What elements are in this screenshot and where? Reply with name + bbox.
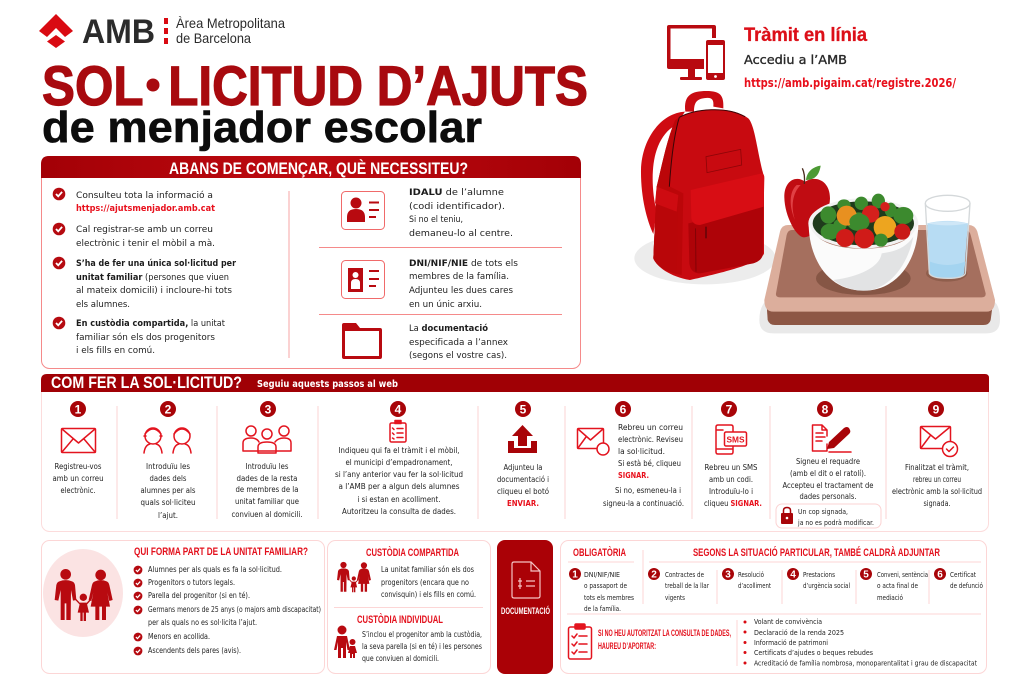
- mandatory heading: OBLIGATÒRIA: [573, 546, 626, 559]
- step 8: Accepteu el tractament de: [782, 481, 874, 490]
- checklist: S’ha de fer una única sol·licitud per: [76, 259, 236, 269]
- document 4: d’urgència social: [803, 581, 850, 590]
- label: DOCUMENTACIÓ: [501, 605, 550, 616]
- list: per als quals no es sol·licita l’ajut.: [148, 618, 257, 627]
- list: Progenitors o tutors legals.: [148, 578, 235, 587]
- document 3: 3: [725, 570, 731, 580]
- step 3: de membres de la: [236, 485, 298, 494]
- panel: before you start: [41, 156, 581, 368]
- glass of water: [925, 195, 970, 278]
- step 9: electrònic amb la sol·licitud: [892, 487, 982, 496]
- document 1: DNI/NIF/NIE: [584, 570, 620, 579]
- document 4: Prestacions: [803, 570, 835, 579]
- DNI item: Adjunteu les dues cares: [409, 286, 513, 296]
- additional documents list: Certificats d’ajudes o beques rebudes: [754, 648, 873, 657]
- checklist: [53, 188, 236, 356]
- online procedure block: [667, 25, 957, 90]
- step 7: SMS: [726, 436, 745, 444]
- documentation item: (segons el vostre cas).: [409, 351, 507, 361]
- step 8: Signeu el requadre: [796, 457, 860, 466]
- panel: how to apply: [41, 373, 989, 532]
- step 3: Introduïu les: [246, 462, 289, 471]
- step 5: 5: [520, 402, 527, 416]
- IDALU item: [342, 188, 513, 239]
- step 7: Introduïu-lo i: [709, 487, 753, 496]
- checklist: En custòdia compartida, la unitat: [76, 318, 225, 329]
- warning text: HAUREU D’APORTAR:: [598, 641, 656, 651]
- step 3: conviuen al domicili.: [232, 510, 302, 519]
- step 4: el municipi d’empadronament,: [346, 458, 452, 467]
- IDALU item: Si no el teniu,: [409, 215, 463, 225]
- step 4: a l’AMB per a algun dels alumnes: [338, 482, 460, 491]
- document 6: [934, 568, 983, 590]
- additional documents list: Volant de convivència: [754, 617, 822, 626]
- list: [134, 565, 321, 655]
- document 5: [860, 568, 928, 602]
- individual custody: la seva parella (si en té) i les persones: [362, 642, 482, 651]
- document 4: [787, 568, 850, 590]
- step 4: [335, 401, 463, 516]
- logo: AMB Àrea Metropolitana de Barcelona: AMB: [82, 13, 155, 51]
- IDALU item: demaneu-lo al centre.: [409, 229, 513, 239]
- document 6: de defunció: [950, 581, 983, 590]
- illustration: red backpack: [634, 91, 776, 284]
- checklist: unitat familiar (persones que viuen: [76, 273, 229, 283]
- step 5: cliqueu el botó: [497, 487, 549, 496]
- apple: [784, 166, 830, 237]
- panel: documentation tab: [497, 540, 553, 674]
- title: ·: [144, 40, 168, 134]
- list: Alumnes per als quals es fa la sol·licitud.: [148, 565, 282, 574]
- step 5: Adjunteu la: [504, 463, 542, 472]
- illustration: tray with apple, salad bowl and glass: [759, 166, 1000, 333]
- step 7: cliqueu SIGNAR.: [704, 499, 762, 508]
- logo: AMB Àrea Metropolitana de Barcelona: de Barcelona: [176, 30, 251, 46]
- lock note: [776, 504, 881, 528]
- section header: [41, 373, 989, 392]
- shared custody: CUSTÒDIA COMPARTIDA: [366, 546, 459, 559]
- checklist: i els fills en comú.: [76, 346, 155, 356]
- section header: Seguiu aquests passos al web: [257, 379, 398, 390]
- step 1: [52, 401, 104, 495]
- step 6: electrònic. Reviseu: [618, 435, 683, 444]
- panel: who forms the family unit: [42, 540, 324, 674]
- step 6: Si està bé, cliqueu: [618, 459, 681, 468]
- step 6: [578, 401, 684, 508]
- subtitle: de menjador escolar: [42, 103, 482, 152]
- step 3: 3: [265, 402, 272, 416]
- logo: AMB Àrea Metropolitana de Barcelona: Àrea Metropolitana: [176, 15, 285, 31]
- shared custody: La unitat familiar són els dos: [381, 565, 474, 574]
- document 6: 6: [937, 570, 943, 580]
- DNI item: en un únic arxiu.: [409, 300, 482, 310]
- additional documents list: Declaració de la renda 2025: [754, 628, 844, 637]
- individual custody: CUSTÒDIA INDIVIDUAL: [357, 613, 443, 626]
- document 3: [722, 568, 771, 590]
- warning text: SI NO HEU AUTORITZAT LA CONSULTA DE DADES,: [598, 628, 731, 638]
- step 6: Rebreu un correu: [618, 423, 683, 432]
- panel header: [41, 156, 581, 178]
- checklist: al mateix domicili) i incloure-hi tots: [76, 286, 232, 296]
- checklist: https://ajutsmenjador.amb.cat: [76, 204, 216, 214]
- step 5: ENVIAR.: [507, 499, 539, 508]
- IDALU item: IDALU de l’alumne: [409, 188, 505, 198]
- panel: custody: [328, 540, 490, 674]
- individual custody: que conviuen al domicili.: [362, 654, 439, 663]
- document 2: 2: [651, 570, 657, 580]
- list: Ascendents dels pares (avis).: [148, 646, 241, 655]
- document 1: 1: [572, 570, 578, 580]
- documentation item: [342, 323, 509, 361]
- icon: monitor and phone: [667, 25, 725, 80]
- list: Germans menors de 25 anys (o majors amb discapacitat): [148, 605, 321, 614]
- step 5: [497, 401, 549, 508]
- shared custody: progenitors (encara que no: [381, 578, 469, 587]
- step 2: Introduïu les: [146, 462, 190, 471]
- title: [42, 40, 588, 134]
- step 4: Indiqueu qui fa el tràmit i el mòbil,: [338, 446, 460, 455]
- checklist: familiar són els dos progenitors: [76, 332, 215, 343]
- step 4: Autoritzeu la consulta de dades.: [342, 507, 456, 516]
- step 7: Rebreu un SMS: [704, 463, 758, 472]
- tray: [759, 225, 1000, 333]
- document 2: [648, 568, 709, 602]
- step 4: 4: [395, 402, 402, 416]
- document 5: Conveni, sentència: [877, 570, 928, 579]
- document 3: d’acolliment: [738, 581, 771, 590]
- step 8: 8: [822, 402, 829, 416]
- list: Parella del progenitor (si en té).: [148, 591, 250, 600]
- salad bowl: [808, 194, 918, 291]
- step 2: dades dels: [150, 474, 187, 483]
- step 2: l’ajut.: [158, 511, 178, 520]
- shared custody: convisquin) i els fills en comú.: [381, 590, 476, 599]
- individual custody: S’inclou el progenitor amb la custòdia,: [362, 630, 482, 639]
- step 9: [892, 401, 982, 508]
- step 1: amb un correu: [52, 474, 104, 483]
- step 8: [776, 401, 881, 528]
- document 1: de la família.: [584, 604, 621, 613]
- warning text: [598, 628, 731, 651]
- title: SOL: [42, 54, 157, 117]
- checklist: electrònic i tenir el mòbil a mà.: [76, 238, 215, 249]
- step 8: dades personals.: [800, 492, 856, 501]
- document 5: 5: [863, 570, 869, 580]
- logo: AMB Àrea Metropolitana de Barcelona: [39, 13, 285, 51]
- panel: required documents: [560, 540, 986, 674]
- individual custody: [334, 613, 482, 663]
- step 4: si l’any anterior vau fer la sol·licitud: [335, 470, 463, 479]
- step 1: electrònic.: [60, 486, 96, 495]
- document 1: o passaport de: [584, 581, 627, 590]
- step 9: rebreu un correu: [913, 475, 961, 484]
- icon: document: [512, 562, 540, 598]
- step 2: [140, 401, 196, 520]
- checklist: els alumnes.: [76, 300, 130, 310]
- additional documents list: Acreditació de família nombrosa, monoparentalitat i grau de discapacitat: [754, 658, 977, 668]
- checklist: Cal registrar-se amb un correu: [76, 225, 213, 235]
- step 3: dades de la resta: [236, 474, 298, 483]
- shared custody: [337, 546, 476, 599]
- access text: Accediu a l’AMB: [744, 53, 847, 67]
- document 1: tots els membres: [584, 593, 634, 602]
- step 2: 2: [165, 402, 172, 416]
- step 5: documentació i: [497, 475, 549, 484]
- document 6: Certificat: [950, 570, 976, 579]
- step 3: [232, 401, 302, 519]
- step 3: unitat familiar que: [235, 497, 299, 506]
- step 7: [704, 401, 762, 508]
- section header: COM FER LA SOL·LICITUD?: [51, 373, 242, 392]
- documentation item: especificada a l’annex: [409, 338, 509, 348]
- icon: family in circle: [43, 549, 123, 637]
- step 9: 9: [933, 402, 940, 416]
- step 7: amb un codi.: [709, 475, 753, 484]
- step 6: signeu-la a continuació.: [603, 499, 684, 508]
- step 2: alumnes per als: [140, 486, 196, 495]
- document 2: Contractes de: [665, 570, 704, 579]
- additional documents list: Informació de patrimoni: [754, 638, 828, 647]
- step 9: Finalitzat el tràmit,: [905, 463, 969, 472]
- step 1: Registreu-vos: [54, 462, 102, 471]
- IDALU item: (codi identificador).: [409, 202, 505, 212]
- step 7: 7: [726, 402, 733, 416]
- step 6: 6: [620, 402, 627, 416]
- document 5: mediació: [877, 593, 903, 602]
- DNI item: [342, 259, 518, 310]
- panel header: ABANS DE COMENÇAR, QUÈ NECESSITEU?: [169, 159, 468, 178]
- lock note: ja no es podrà modificar.: [797, 518, 874, 527]
- DNI item: membres de la família.: [409, 272, 509, 282]
- DNI item: DNI/NIF/NIE de tots els: [409, 259, 518, 269]
- online heading: Tràmit en línia: [744, 25, 867, 46]
- list: Menors en acollida.: [148, 632, 210, 641]
- documentation item: La documentació: [409, 323, 488, 334]
- title: LICITUD D’AJUTS: [168, 54, 588, 117]
- step 8: (amb el dit o el ratolí).: [790, 469, 866, 478]
- step 6: la sol·licitud.: [618, 447, 665, 456]
- additional documents list: [744, 617, 977, 668]
- step 6: SIGNAR.: [618, 471, 649, 480]
- document 1: [569, 568, 634, 613]
- document 5: o acta final de: [877, 581, 918, 590]
- document 3: Resolució: [738, 570, 764, 579]
- step 4: i si estan en acolliment.: [358, 495, 440, 504]
- step 2: quals sol·liciteu: [140, 498, 196, 507]
- step 6: Si no, esmeneu-la i: [615, 486, 681, 495]
- heading: QUI FORMA PART DE LA UNITAT FAMILIAR?: [134, 546, 308, 558]
- document 2: treball de la llar: [665, 581, 709, 590]
- document 2: vigents: [665, 593, 685, 602]
- lock note: Un cop signada,: [798, 507, 848, 516]
- online URL: https://amb.pigaim.cat/registre.2026/: [744, 76, 957, 90]
- icon: checklist clipboard: [568, 624, 592, 659]
- step 1: 1: [75, 402, 82, 416]
- checklist: Consulteu tota la informació a: [76, 190, 213, 201]
- step 9: signada.: [924, 499, 950, 508]
- document 4: 4: [790, 570, 796, 580]
